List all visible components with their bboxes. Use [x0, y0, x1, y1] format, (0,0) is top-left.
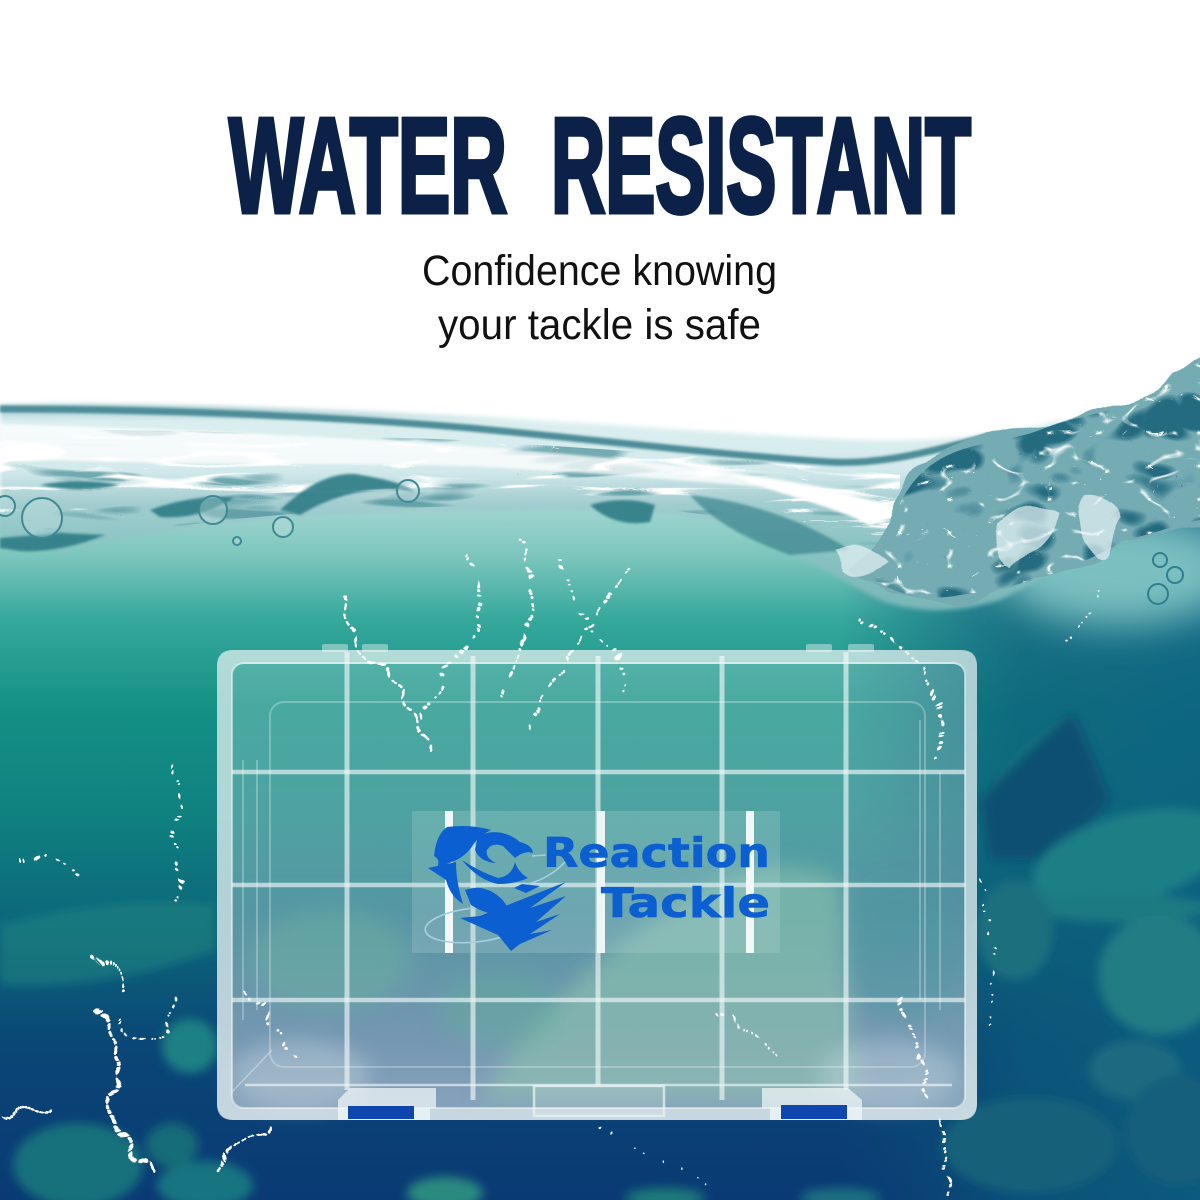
wave splash on the right — [835, 355, 1200, 604]
surface dark streaks — [0, 474, 850, 555]
air bubbles — [0, 480, 978, 545]
right latch — [762, 1088, 862, 1120]
horizontal dividers — [232, 772, 965, 1085]
surface dark meniscus line — [0, 409, 990, 462]
handle recess — [534, 1086, 664, 1116]
top hinges — [322, 644, 874, 652]
inner rim — [232, 663, 965, 1108]
subtitle: your tackle is safe — [438, 301, 761, 349]
surface dark streak texture — [0, 430, 900, 590]
background: underwater rocks — [0, 713, 1200, 1200]
vertical dividers — [347, 652, 846, 1100]
title — [229, 90, 971, 241]
logo: brand name — [543, 829, 770, 927]
water splash droplets — [5, 540, 1100, 1195]
subtitle — [422, 247, 777, 349]
inner rocks seen through box — [230, 867, 960, 1110]
logo: brand name: Reaction — [543, 829, 770, 877]
background: deep water gradient — [0, 500, 1200, 1200]
logo: fishing line — [423, 855, 565, 947]
title: WATER — [229, 90, 507, 241]
product: clear tackle box — [217, 644, 977, 1120]
thin moulding lines — [232, 720, 940, 1092]
splash translucent lobes — [835, 498, 1125, 579]
subtitle: Confidence knowing — [422, 247, 777, 295]
surface highlights texture — [0, 425, 900, 540]
logo: brand name: Tackle — [601, 879, 770, 927]
logo label sticker — [412, 811, 780, 953]
logo: bass fish — [428, 826, 566, 951]
box frame — [217, 650, 977, 1120]
box body — [217, 650, 977, 1120]
water surface wave — [0, 404, 1060, 610]
splash dark marbling — [860, 362, 1200, 598]
splash white highlights — [860, 362, 1200, 598]
background: white sky — [0, 0, 1200, 560]
left latch — [338, 1088, 436, 1120]
surface light ripples — [0, 424, 920, 525]
inner tray outline — [270, 702, 925, 1067]
